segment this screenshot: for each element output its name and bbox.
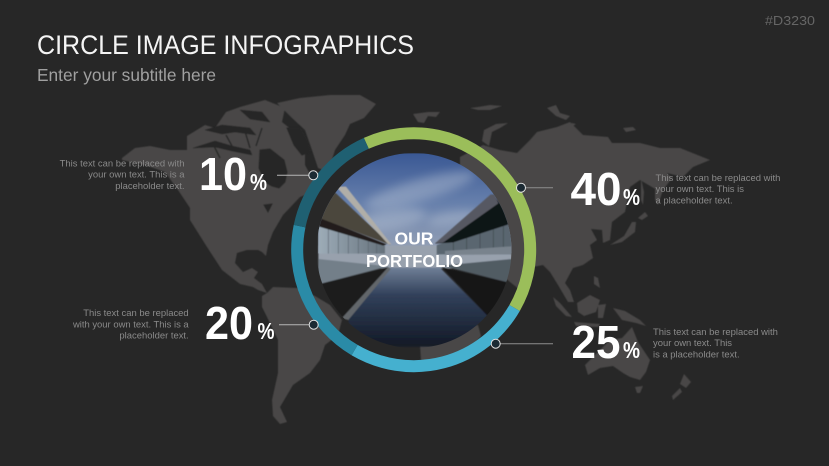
central photo (318, 153, 512, 347)
title: CIRCLE IMAGE INFOGRAPHICS (37, 30, 414, 60)
ring segment: teal 20 percent (297, 226, 355, 350)
photo: clouds (362, 168, 476, 232)
leader line and dot (491, 339, 553, 348)
description (60, 158, 185, 192)
value: % (623, 184, 640, 210)
description: placeholder text. (119, 331, 189, 342)
photo: horizon (318, 246, 512, 268)
description: This text can be replaced (83, 308, 189, 319)
description: This text can be replaced with (653, 327, 778, 338)
land: australia (585, 327, 650, 380)
value: % (258, 318, 274, 344)
land: new guinea (613, 308, 646, 326)
description (653, 327, 778, 360)
description: This text can be replaced with (656, 173, 780, 184)
photo: left reflection (318, 259, 388, 284)
ring segment: light blue 25 percent (355, 308, 515, 366)
photo: right building roof (435, 194, 512, 244)
description (72, 308, 189, 342)
center label (366, 228, 463, 271)
land: novaya zemlya (482, 123, 508, 146)
land: tasmania and new zealand (635, 374, 691, 400)
value: 10 (199, 148, 247, 200)
ring segment: green 40 percent (366, 133, 530, 308)
value: 25 (572, 316, 620, 368)
description: placeholder text. (115, 181, 184, 192)
description: your own text. This is (656, 184, 744, 195)
callout: 40 percent (516, 163, 780, 215)
callout: 25 percent (491, 316, 778, 368)
photo: right glass facade (437, 222, 512, 254)
land: asia and europe (460, 122, 710, 302)
code label: #D3230 (765, 13, 815, 28)
callout: 20 percent (72, 297, 318, 349)
value: 40 (570, 163, 622, 215)
land: arctic islands (413, 105, 636, 132)
description: a placeholder text. (656, 195, 733, 206)
description: your own text. This is a (88, 170, 185, 181)
ring segment: dark teal 10 percent (300, 143, 366, 226)
photo: left building roof (318, 192, 391, 245)
description (656, 173, 780, 206)
water: hudson bay and arctic channels (193, 110, 310, 212)
land: africa tip (420, 325, 481, 363)
leader line and dot (279, 320, 318, 329)
description: This text can be replaced with (60, 158, 184, 170)
description: your own text. This (653, 338, 732, 349)
value: 20 (205, 297, 253, 349)
photo: railing (445, 246, 512, 255)
land: greenland (277, 95, 376, 172)
center label: OUR (395, 228, 434, 248)
center label: PORTFOLIO (366, 251, 463, 271)
value: % (623, 337, 640, 363)
land: south america (262, 287, 342, 424)
value: % (250, 169, 267, 195)
leader line and dot (516, 183, 553, 192)
photo: right reflection (442, 259, 512, 283)
land: south east asia (553, 295, 606, 327)
subtitle: Enter your subtitle here (37, 65, 216, 85)
world map (122, 95, 710, 424)
description: with your own text. This is a (72, 319, 189, 330)
land: japan and kamchatka (594, 173, 672, 288)
segmented ring (297, 133, 530, 366)
land: north america (122, 100, 318, 293)
photo: water (348, 268, 490, 347)
photo: left window band (318, 217, 387, 246)
photo: left glass facade (318, 226, 385, 254)
callout: 10 percent (60, 148, 318, 200)
leader line and dot (277, 171, 318, 180)
photo: sky (318, 153, 512, 253)
description: is a placeholder text. (653, 349, 740, 360)
